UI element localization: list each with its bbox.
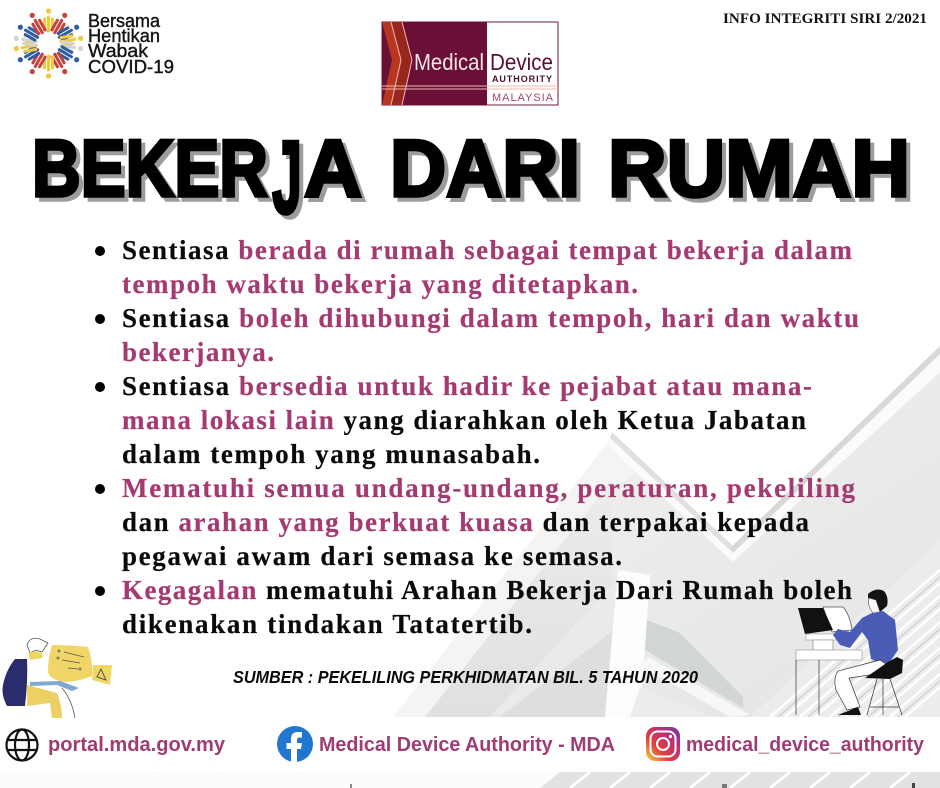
bullet 5: dikenakan tindakan Tatatertib. [122,609,532,639]
bottom strip [0,772,940,788]
bullet 2: bekerjanya. [122,337,274,367]
logo text: Bersama [88,11,161,31]
title shadow [36,124,914,240]
logo: Medical Device Authority Malaysia: MALAYSIA [492,92,554,104]
bullet 1 [95,235,852,299]
bullet 1: Sentiasa berada di rumah sebagai tempat bekerja dalam [122,235,852,265]
bullet 5: Kegagalan mematuhi Arahan Bekerja Dari Rumah boleh [122,575,852,605]
bullet 2 [95,303,859,367]
bullet 2: Sentiasa boleh dihubungi dalam tempoh, hari dan waktu [122,303,859,333]
title [32,120,914,240]
bullet 3 [95,371,812,469]
title text: J [272,120,302,236]
logo text: Wabak [88,41,149,61]
bullet list [95,235,859,639]
bullet 5 [95,575,852,639]
logo: Medical Device Authority Malaysia: Device [490,49,553,75]
logo: Medical Device Authority Malaysia: AUTHORITY [492,74,552,84]
icon: facebook [277,726,313,762]
logo: Medical Device Authority Malaysia [382,22,558,105]
title text: DARI [390,124,580,214]
logo text [88,11,174,77]
logo text: COVID-19 [88,57,174,77]
footer: website: portal.mda.gov.my [48,734,226,756]
series label: INFO INTEGRITI SIRI 2/2021 [723,11,927,27]
bullet 4: pegawai awam dari semasa ke semasa. [122,541,622,571]
title shadow: RUMAH [612,128,914,218]
bullet 4: dan arahan yang berkuat kuasa dan terpakai kepada [122,507,810,537]
title shadow: A [308,128,366,218]
title text: RUMAH [608,124,910,214]
bullet 3: mana lokasi lain yang diarahkan oleh Ketua Jabatan [122,405,806,435]
footer: facebook: Medical Device Authority - MDA [319,734,615,756]
logo: Bersama Hentikan Wabak COVID-19 [13,8,174,79]
footer: facebook [277,726,615,762]
icon: covid campaign sunburst [13,8,84,79]
footer white band [0,717,940,772]
illustration: man at computer [796,590,903,715]
title text: BEKER [32,124,268,214]
bullet 4 [95,473,856,571]
title text [32,120,910,236]
icon: instagram [646,727,680,761]
source line: SUMBER : PEKELILING PERKHIDMATAN BIL. 5 TAHUN 2020 [233,667,698,687]
footer: instagram [646,727,925,761]
logo text: Hentikan [88,26,160,46]
title text: A [304,124,362,214]
bullet 3: dalam tempoh yang munasabah. [122,439,540,469]
footer: website [6,730,226,760]
bullet 3: Sentiasa bersedia untuk hadir ke pejabat atau mana- [122,371,812,401]
logo: Medical Device Authority Malaysia: Medical [414,49,484,75]
title shadow: J [276,124,306,240]
title shadow: DARI [394,128,584,218]
bullet 1: tempoh waktu bekerja yang ditetapkan. [122,269,638,299]
illustration: woman with floating screens [2,638,112,718]
title shadow: BEKER [36,128,272,218]
icon: globe [6,730,38,760]
footer: instagram: medical_device_authority [686,734,925,756]
bullet 4: Mematuhi semua undang-undang, peraturan, pekeliling [122,473,856,503]
